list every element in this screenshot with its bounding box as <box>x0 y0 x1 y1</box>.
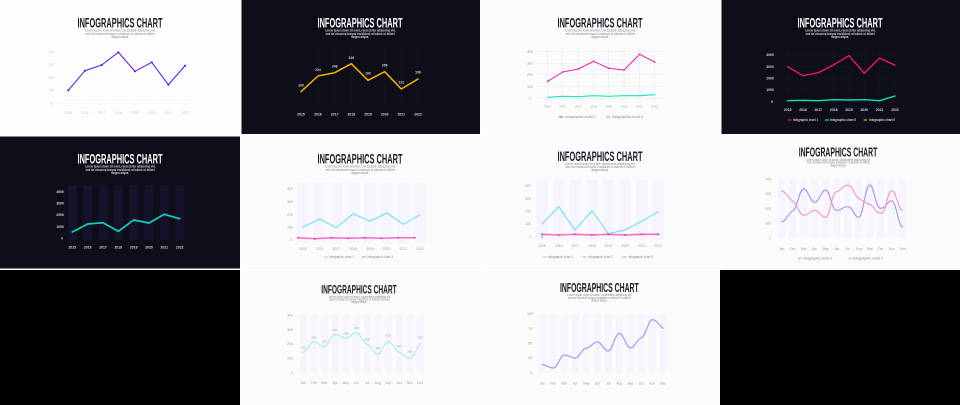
chart: 100 <box>49 88 54 92</box>
subtitle <box>565 29 636 39</box>
chart: 196 <box>415 71 421 75</box>
panel: white blue and pink line chart with bars <box>242 136 480 268</box>
chart: 100 <box>525 222 531 226</box>
subtitle: Lorem ipsum dolor sit amet, consectetur adipiscing elit, <box>85 29 156 33</box>
chart <box>525 180 664 248</box>
chart: Apr <box>573 381 579 385</box>
chart: 400 <box>525 184 531 188</box>
chart: 2022 <box>651 105 658 109</box>
subtitle: Lorem ipsum dolor sit amet, consectetur adipiscing elit, <box>565 29 636 33</box>
subtitle <box>805 29 876 39</box>
chart: 279 <box>354 326 359 330</box>
legend: Infographic chart 2 <box>588 255 613 259</box>
chart: 3000 <box>56 202 64 206</box>
chart: 0 <box>290 238 292 242</box>
chart: 2017 <box>333 247 340 251</box>
subtitle: Lorem ipsum dolor sit amet, consectetur adipiscing elit, <box>325 29 396 33</box>
subtitle: Lorem ipsum dolor sit amet, consectetur adipiscing elit, <box>85 165 156 169</box>
subtitle <box>325 29 396 39</box>
subtitle: magna aliqua. <box>351 35 369 39</box>
legend: Infographic chart 1 <box>793 118 818 122</box>
chart: 0 <box>771 100 773 104</box>
chart: 2020 <box>861 108 868 112</box>
chart: 300 <box>287 328 293 332</box>
subtitle <box>85 29 156 39</box>
chart: 400 <box>287 187 293 191</box>
chart: 2019 <box>364 112 372 116</box>
legend: Infographic chart 1 <box>329 255 354 259</box>
subtitle <box>329 295 391 304</box>
chart: 2016 <box>314 112 322 116</box>
chart <box>49 50 194 115</box>
chart: 100 <box>527 85 533 89</box>
subtitle: sed do eiusmod tempor incididunt ut labore et dolore <box>86 32 155 36</box>
chart: 300 <box>525 197 531 201</box>
chart: 0 <box>61 236 63 240</box>
chart: 2019 <box>131 111 139 115</box>
chart: Dec <box>417 381 424 385</box>
chart <box>766 50 902 112</box>
legend <box>543 255 653 259</box>
title: INFOGRAPHICS CHART <box>318 151 403 166</box>
legend: Infographic chart 6 <box>869 118 895 122</box>
chart: 2020 <box>383 247 391 251</box>
subtitle: sed do eiusmod tempor incididunt ut labore et dolore <box>326 168 395 172</box>
chart: 300 <box>765 192 771 196</box>
chart: 0 <box>530 371 532 375</box>
chart: Feb <box>790 247 796 251</box>
chart: 2022 <box>655 244 662 248</box>
chart: 316 <box>348 56 354 60</box>
chart: Apr <box>812 247 818 251</box>
chart: 2016 <box>799 108 807 112</box>
subtitle <box>325 165 396 175</box>
title: INFOGRAPHICS CHART <box>318 16 403 31</box>
chart: Nov <box>889 247 895 251</box>
chart: Jun <box>834 247 840 251</box>
chart: Jan <box>779 247 785 251</box>
chart: 400 <box>527 50 533 54</box>
chart: 200 <box>287 213 293 217</box>
chart: Mar <box>801 247 807 251</box>
chart: Dec <box>900 247 906 251</box>
chart: Dec <box>660 381 666 385</box>
chart: 75 <box>528 327 532 331</box>
chart: 50 <box>528 342 532 346</box>
chart: 2016 <box>559 105 566 109</box>
chart: 0 <box>291 371 293 375</box>
chart: 224 <box>315 68 321 72</box>
chart: Sep <box>627 381 633 385</box>
chart: 216 <box>386 334 391 338</box>
panel: white three series line chart with bars <box>482 136 720 268</box>
chart: May <box>583 381 590 385</box>
chart: 205 <box>418 335 423 339</box>
chart: 2018 <box>350 247 357 251</box>
chart: 128 <box>375 346 381 350</box>
panel: white pink and green line chart <box>482 0 720 134</box>
legend: Infographic chart 1 <box>548 255 573 259</box>
legend: Infographic chart 2 <box>853 256 883 260</box>
panel: white purple smooth chart <box>481 271 720 405</box>
subtitle: magna aliqua. <box>351 300 367 304</box>
chart: 200 <box>765 207 771 211</box>
panel: dark pink and green line chart <box>722 0 960 134</box>
chart: Oct <box>639 381 644 385</box>
chart: 2020 <box>381 112 389 116</box>
legend: Infographic chart 3 <box>367 255 393 259</box>
chart: 200 <box>525 210 531 214</box>
chart: Jul <box>606 381 611 385</box>
chart: 4000 <box>56 190 64 194</box>
chart: 2020 <box>145 246 153 250</box>
chart: 216 <box>311 335 317 339</box>
chart: Aug <box>616 381 622 385</box>
chart: 2018 <box>348 112 355 116</box>
chart: 256 <box>382 64 388 68</box>
chart: 1000 <box>56 225 64 229</box>
subtitle: magna aliqua. <box>591 168 609 172</box>
chart: Aug <box>856 247 862 251</box>
chart: 300 <box>287 200 293 204</box>
chart: 179 <box>322 339 327 343</box>
chart: 2021 <box>638 244 646 248</box>
chart: 2015 <box>538 244 546 248</box>
chart <box>287 314 424 385</box>
chart: 2018 <box>590 105 597 109</box>
subtitle: sed do eiusmod tempor incididunt ut labore et dolore <box>326 32 395 36</box>
subtitle <box>85 165 156 175</box>
chart: 2015 <box>65 111 72 115</box>
subtitle: magna aliqua. <box>830 163 847 167</box>
chart: Nov <box>649 381 656 385</box>
subtitle: sed do eiusmod tempor incididunt ut labore et dolore <box>566 32 635 36</box>
chart: 3000 <box>766 65 774 69</box>
chart: 2018 <box>115 246 122 250</box>
chart: 300 <box>49 63 54 67</box>
chart <box>527 46 663 109</box>
chart <box>527 312 667 385</box>
chart: 100 <box>527 312 533 316</box>
chart: 2021 <box>636 105 643 109</box>
legend: Infographic chart 1 <box>803 256 833 260</box>
chart: 122 <box>398 80 404 84</box>
chart: 400 <box>49 50 54 54</box>
subtitle: Lorem ipsum dolor sit amet, consectetur adipiscing elit, <box>565 162 636 166</box>
chart: 2000 <box>56 213 64 217</box>
chart: 2022 <box>181 111 189 115</box>
chart: 142 <box>300 345 306 349</box>
panel: white smooth chart with value labels <box>241 271 480 405</box>
chart: 2016 <box>555 244 563 248</box>
subtitle: Lorem ipsum dolor sit amet, consectetur adipiscing elit, <box>325 165 396 169</box>
legend <box>798 256 883 260</box>
chart: 2020 <box>621 244 629 248</box>
subtitle: sed do eiusmod tempor incididunt ut labore et dolore <box>806 32 875 36</box>
chart: 2021 <box>398 112 405 116</box>
panel: dark yellow line chart <box>242 0 480 134</box>
subtitle: magna aliqua. <box>111 171 129 175</box>
legend <box>324 255 393 259</box>
chart: May <box>822 247 829 251</box>
chart: 2022 <box>176 246 184 250</box>
chart: 2018 <box>115 111 122 115</box>
chart: 239 <box>343 331 349 335</box>
subtitle: magna aliqua. <box>591 298 608 302</box>
chart: 0 <box>529 235 531 239</box>
chart: Sep <box>867 247 873 251</box>
subtitle: sed do eiusmod tempor incididunt ut labore et dolore <box>568 296 631 300</box>
panel: empty black right <box>720 270 960 405</box>
title: INFOGRAPHICS CHART <box>558 149 643 164</box>
subtitle: sed do eiusmod tempor incididunt ut labore et dolore <box>566 165 635 169</box>
chart: 2016 <box>81 111 89 115</box>
chart: Nov <box>407 381 413 385</box>
subtitle: magna aliqua. <box>351 171 369 175</box>
chart: 190 <box>365 72 371 76</box>
chart: 100 <box>287 356 293 360</box>
chart: 2000 <box>766 76 774 80</box>
chart: Jan <box>540 381 545 385</box>
chart: Jul <box>846 247 850 251</box>
chart: Feb <box>550 381 556 385</box>
chart: 0 <box>51 102 53 106</box>
chart: 2015 <box>69 246 76 250</box>
panel: white single line chart <box>0 0 240 135</box>
legend: Infographic chart 1 <box>565 115 596 119</box>
chart: 2017 <box>571 244 579 248</box>
chart: Feb <box>311 381 317 385</box>
legend: Infographic chart 3 <box>628 255 653 259</box>
chart: 2020 <box>621 105 628 109</box>
chart: Jun <box>595 381 600 385</box>
subtitle: Lorem ipsum dolor sit amet, consectetur adipiscing elit, <box>805 29 876 33</box>
chart: 2017 <box>815 108 822 112</box>
chart: May <box>342 381 349 385</box>
chart <box>287 183 426 251</box>
chart: 300 <box>527 62 533 66</box>
chart: 200 <box>287 342 293 346</box>
panel: empty black left <box>0 270 240 405</box>
chart: 2019 <box>366 247 374 251</box>
title: INFOGRAPHICS CHART <box>78 16 163 31</box>
title: INFOGRAPHICS CHART <box>799 146 877 160</box>
chart: 2022 <box>416 247 424 251</box>
chart: 198 <box>364 338 370 342</box>
chart <box>56 185 184 250</box>
chart: 2021 <box>876 108 884 112</box>
subtitle <box>806 158 871 167</box>
subtitle: magna aliqua. <box>591 35 609 39</box>
chart: 2015 <box>544 105 551 109</box>
chart: 100 <box>298 83 304 87</box>
chart: Jun <box>354 381 359 385</box>
chart: 2015 <box>299 247 307 251</box>
chart: 2018 <box>830 108 838 112</box>
legend: Infographic chart 4 <box>612 115 643 119</box>
chart: 400 <box>765 178 771 182</box>
chart: Oct <box>878 247 883 251</box>
chart: 100 <box>765 222 771 226</box>
subtitle: magna aliqua. <box>111 35 129 39</box>
chart: 2022 <box>891 108 899 112</box>
chart: Oct <box>396 381 402 385</box>
chart: Aug <box>375 381 381 385</box>
chart: 200 <box>49 76 54 80</box>
chart: 100 <box>407 350 413 354</box>
subtitle <box>565 162 636 172</box>
chart: 4000 <box>766 53 774 57</box>
chart: 2021 <box>400 247 407 251</box>
chart: Jul <box>365 381 369 385</box>
chart: 2019 <box>605 105 612 109</box>
chart: Mar <box>561 381 568 385</box>
chart: Mar <box>321 381 328 385</box>
title: INFOGRAPHICS CHART <box>321 282 397 296</box>
chart: 2021 <box>165 111 172 115</box>
chart: 0 <box>529 96 531 100</box>
title: INFOGRAPHICS CHART <box>798 16 883 31</box>
chart: 1000 <box>766 88 774 92</box>
chart: 2019 <box>130 246 138 250</box>
chart: 2015 <box>297 112 305 116</box>
chart: 0 <box>769 236 771 240</box>
chart: 2022 <box>414 112 422 116</box>
subtitle: Lorem ipsum dolor sit amet, consectetur adipiscing elit, <box>806 158 871 162</box>
chart: 2019 <box>605 244 612 248</box>
chart: 2017 <box>98 111 106 115</box>
chart: 2020 <box>148 111 156 115</box>
legend: Infographic chart 5 <box>830 118 856 122</box>
chart: 2017 <box>575 105 582 109</box>
chart: Jan <box>300 381 306 385</box>
subtitle: sed do eiusmod tempor incididunt ut labore et dolore <box>330 297 390 301</box>
chart: 2017 <box>331 112 339 116</box>
chart: 2017 <box>99 246 107 250</box>
chart: 2016 <box>84 246 92 250</box>
subtitle: sed do eiusmod tempor incididunt ut labore et dolore <box>86 168 155 172</box>
chart: 200 <box>527 73 533 77</box>
legend <box>559 115 643 119</box>
chart: 144 <box>396 344 402 348</box>
chart: 2021 <box>161 246 168 250</box>
chart: 267 <box>332 328 338 332</box>
chart: 25 <box>528 356 532 360</box>
legend <box>788 118 895 122</box>
chart <box>765 178 906 251</box>
title: INFOGRAPHICS CHART <box>558 16 643 31</box>
subtitle: magna aliqua. <box>831 35 849 39</box>
panel: dark teal line chart with bars <box>0 136 240 268</box>
chart <box>297 47 422 116</box>
chart: 2016 <box>316 247 324 251</box>
subtitle: Lorem ipsum dolor sit amet, consectetur adipiscing elit, <box>567 293 632 297</box>
panel: white two series smooth chart <box>722 136 960 268</box>
chart: Apr <box>332 381 339 385</box>
chart: 2019 <box>845 108 853 112</box>
chart: Sep <box>385 381 391 385</box>
subtitle <box>567 293 632 302</box>
chart: 2018 <box>588 244 596 248</box>
chart: 400 <box>287 314 293 318</box>
chart: 248 <box>332 65 338 69</box>
title: INFOGRAPHICS CHART <box>78 151 163 166</box>
title: INFOGRAPHICS CHART <box>560 281 639 295</box>
subtitle: Lorem ipsum dolor sit amet, consectetur adipiscing elit, <box>329 295 391 299</box>
chart: 2015 <box>784 108 792 112</box>
chart: 100 <box>287 226 293 230</box>
subtitle: sed do eiusmod tempor incididunt ut labore et dolore <box>807 160 870 164</box>
